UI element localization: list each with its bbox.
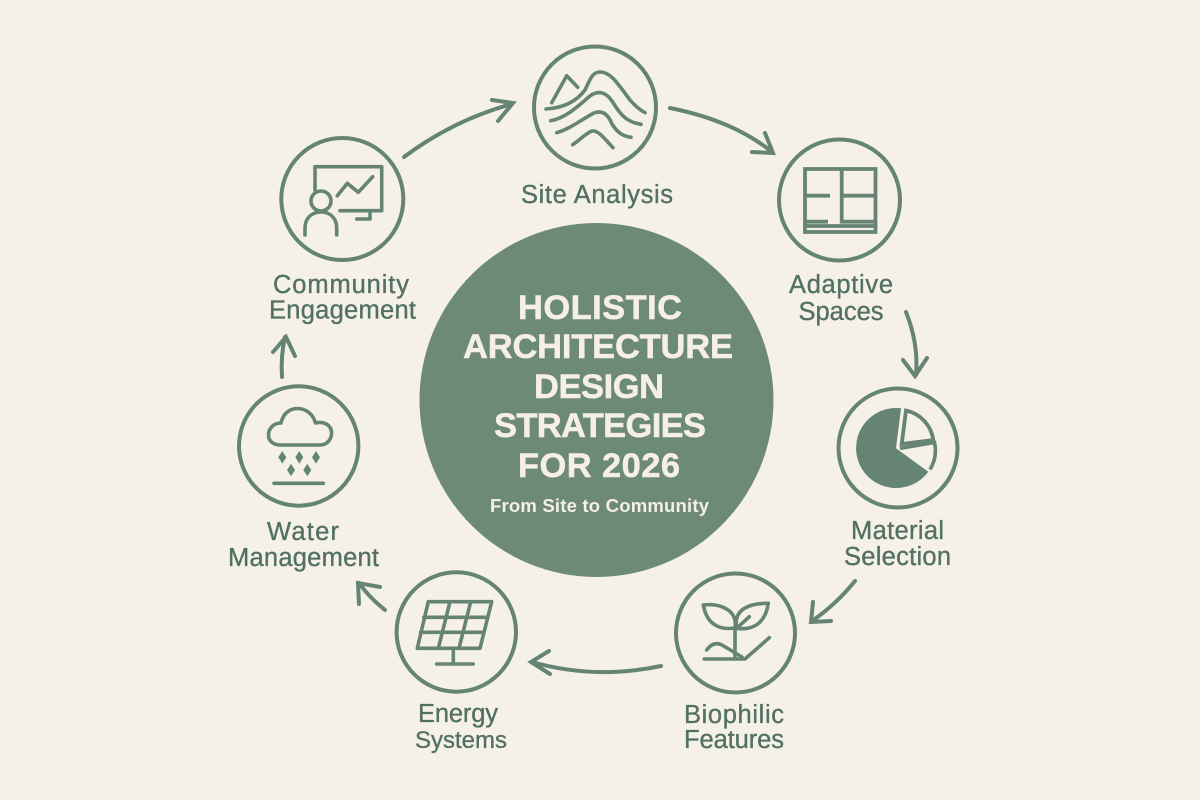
arrow: site analysis to adaptive spaces <box>670 108 773 153</box>
node: Adaptive Spaces <box>779 140 900 326</box>
label: Energy <box>418 700 498 728</box>
node: Community Engagement <box>269 138 416 324</box>
label: Adaptive <box>789 271 893 299</box>
icon: solar panel <box>397 572 516 692</box>
arrow: adaptive spaces to material selection <box>903 312 927 376</box>
label <box>228 518 379 572</box>
label: Material <box>851 517 944 545</box>
arrow: water management to community engagement <box>273 337 295 377</box>
title: FOR 2026 <box>518 447 680 485</box>
label <box>844 517 951 571</box>
icon: sprout in hand <box>676 574 795 692</box>
icon: presenter at board <box>281 138 403 260</box>
label: Community <box>273 271 409 299</box>
arrow: biophilic features to energy systems <box>531 651 661 674</box>
label: Features <box>684 726 784 754</box>
node: Water Management <box>228 386 379 572</box>
icon: floor plan <box>779 140 900 260</box>
label <box>415 700 507 754</box>
label: Management <box>228 544 379 572</box>
icon: topography <box>534 46 656 168</box>
title: STRATEGIES <box>494 407 706 445</box>
label: Engagement <box>269 296 416 324</box>
label <box>684 701 784 754</box>
node: Energy Systems <box>397 572 516 754</box>
central hub <box>420 223 774 577</box>
label: Systems <box>415 727 507 754</box>
icon: pie chart <box>838 388 958 508</box>
subtitle: From Site to Community <box>490 495 710 516</box>
label <box>269 271 416 324</box>
node: Site Analysis <box>521 46 673 209</box>
title <box>463 289 733 485</box>
arrow: energy systems to water management <box>358 583 385 610</box>
label: Biophilic <box>684 701 784 729</box>
title: ARCHITECTURE <box>463 328 733 366</box>
title: HOLISTIC <box>518 289 682 327</box>
arrow: material selection to biophilic features <box>811 581 855 622</box>
node: Biophilic Features <box>676 574 795 754</box>
arrow: community engagement to site analysis <box>404 100 513 157</box>
label: Water <box>267 518 340 546</box>
icon: rain cloud <box>239 386 358 506</box>
label: Site Analysis <box>521 181 673 209</box>
label: Selection <box>844 543 951 571</box>
label <box>789 271 893 326</box>
label: Spaces <box>798 298 884 326</box>
title: DESIGN <box>534 368 664 406</box>
node: Material Selection <box>838 388 958 571</box>
